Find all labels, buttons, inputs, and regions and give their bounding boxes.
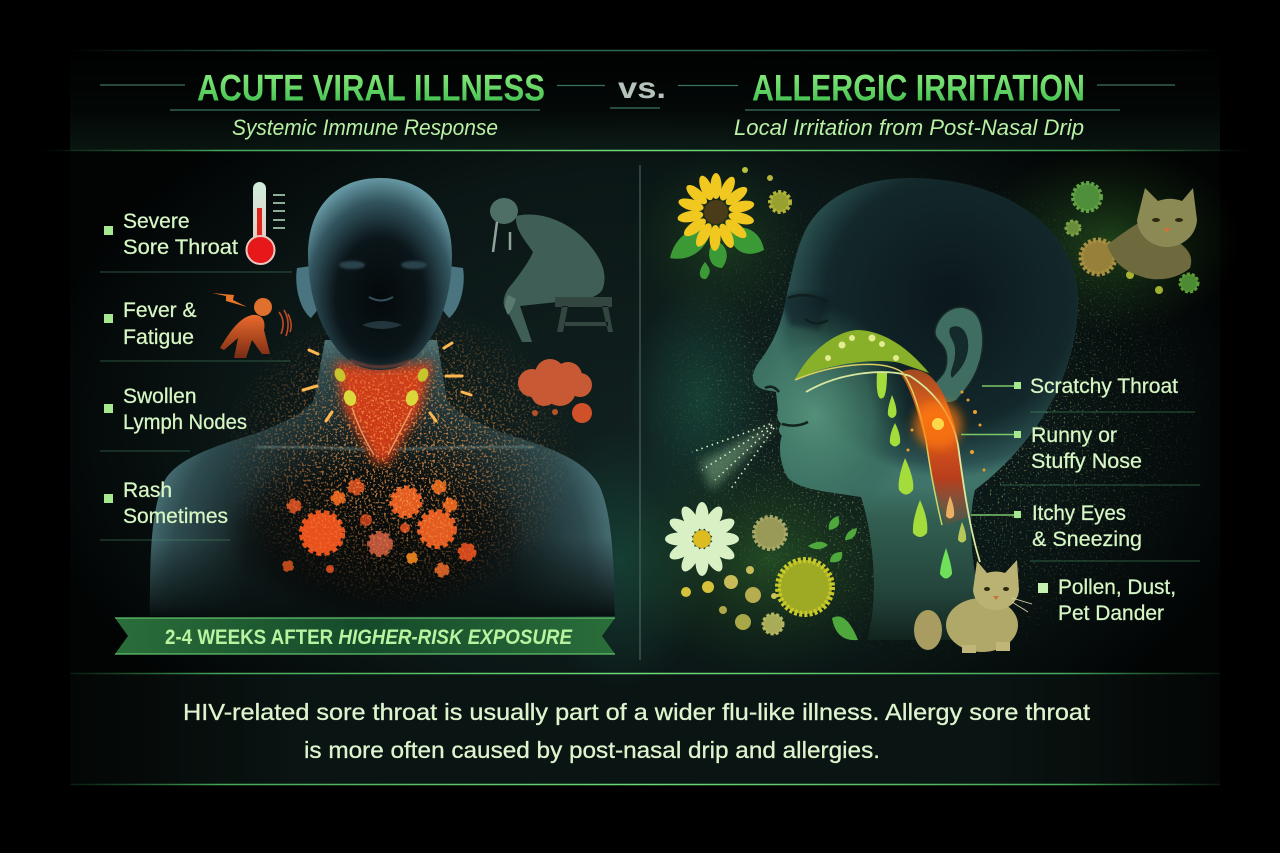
- green pollen haze: [646, 164, 1214, 656]
- title row: [100, 68, 1175, 110]
- nasal spots: [825, 334, 899, 361]
- head silhouette: [752, 178, 1078, 640]
- symptom list: left: [100, 210, 292, 540]
- speckle: [220, 300, 580, 610]
- nasal passage: [795, 330, 929, 380]
- banner: exposure timing: [115, 618, 615, 654]
- icon: person with fever: [212, 293, 291, 358]
- footer summary text: HIV-related sore throat is usually part of a wider flu-like illness. Allergy sore throat: [183, 699, 1091, 725]
- symptom: fever and fatigue: [104, 299, 197, 349]
- radiating sparks: [303, 343, 471, 421]
- symptom: itchy eyes and sneezing: [1014, 502, 1142, 551]
- figure: head in profile with post-nasal drip: [752, 178, 1078, 640]
- symptom: severe sore throat: [104, 210, 238, 259]
- head: [296, 178, 464, 370]
- symptom: runny or stuffy nose: Stuffy Nose: [1031, 450, 1142, 473]
- orange particles near throat: [906, 390, 986, 472]
- symptom: scratchy throat: Scratchy Throat: [1030, 375, 1178, 398]
- ear: [932, 307, 983, 403]
- subtitle: right: Local Irritation from Post-Nasal Drip: [734, 115, 1084, 140]
- icon: sunflower: [670, 173, 764, 279]
- icon: daisy: [665, 502, 739, 576]
- versus label: vs.: [618, 72, 666, 105]
- symptom: swollen lymph nodes: [104, 385, 247, 434]
- symptom: itchy eyes and sneezing: Itchy Eyes: [1032, 502, 1126, 525]
- figure: human bust with inflamed throat: [150, 178, 615, 620]
- symptom: pollen, dust, pet dander: Pollen, Dust,: [1058, 576, 1176, 599]
- mouth and nostril: [765, 387, 808, 426]
- symptom: swollen lymph nodes: Swollen: [123, 385, 197, 408]
- symptom: swollen lymph nodes: Lymph Nodes: [123, 411, 247, 434]
- symptom: rash sometimes: [104, 479, 228, 528]
- icon: cat lower right: [914, 560, 1032, 653]
- sneeze spray: [692, 422, 778, 490]
- symptom: rash sometimes: Sometimes: [123, 505, 228, 528]
- symptom: pollen, dust, pet dander: [1038, 576, 1176, 625]
- symptom: fever and fatigue: Fatigue: [123, 326, 194, 349]
- icon: inflamed cells: [518, 359, 592, 423]
- heading: allergic irritation: ALLERGIC IRRITATION: [752, 68, 1085, 108]
- banner: exposure timing: 2-4 WEEKS AFTER HIGHER-RISK EXPOSURE: [165, 626, 573, 649]
- symptom: severe sore throat: Severe: [123, 210, 190, 233]
- symptom: runny or stuffy nose: Runny or: [1031, 424, 1117, 447]
- symptom: runny or stuffy nose: [1014, 424, 1142, 473]
- torso: [150, 340, 615, 620]
- subtitle: left: Systemic Immune Response: [232, 115, 498, 140]
- icon: pollen clusters and leaves: [681, 167, 1198, 640]
- mucus drops: [877, 373, 966, 578]
- swollen lymph nodes: [333, 367, 430, 455]
- icon: thermometer: [246, 182, 285, 264]
- throat passage: [795, 364, 980, 562]
- symptom: itchy eyes and sneezing: & Sneezing: [1032, 528, 1142, 551]
- symptom: fever and fatigue: Fever &: [123, 299, 197, 322]
- throat inflammation glow: [335, 362, 433, 463]
- symptom list: right: [961, 375, 1200, 625]
- inflammation spot: [914, 401, 962, 449]
- eye and brow: [788, 295, 828, 323]
- icon: fatigued seated person: [490, 198, 613, 342]
- chest rash: [283, 480, 475, 576]
- symptom: severe sore throat: Sore Throat: [123, 236, 238, 259]
- footer summary text: is more often caused by post-nasal drip and allergies.: [304, 737, 880, 763]
- symptom: pollen, dust, pet dander: Pet Dander: [1058, 602, 1164, 625]
- heading: acute viral illness: ACUTE VIRAL ILLNESS: [197, 68, 545, 108]
- icon: cat upper right: [1107, 188, 1197, 279]
- symptom: rash sometimes: Rash: [123, 479, 172, 502]
